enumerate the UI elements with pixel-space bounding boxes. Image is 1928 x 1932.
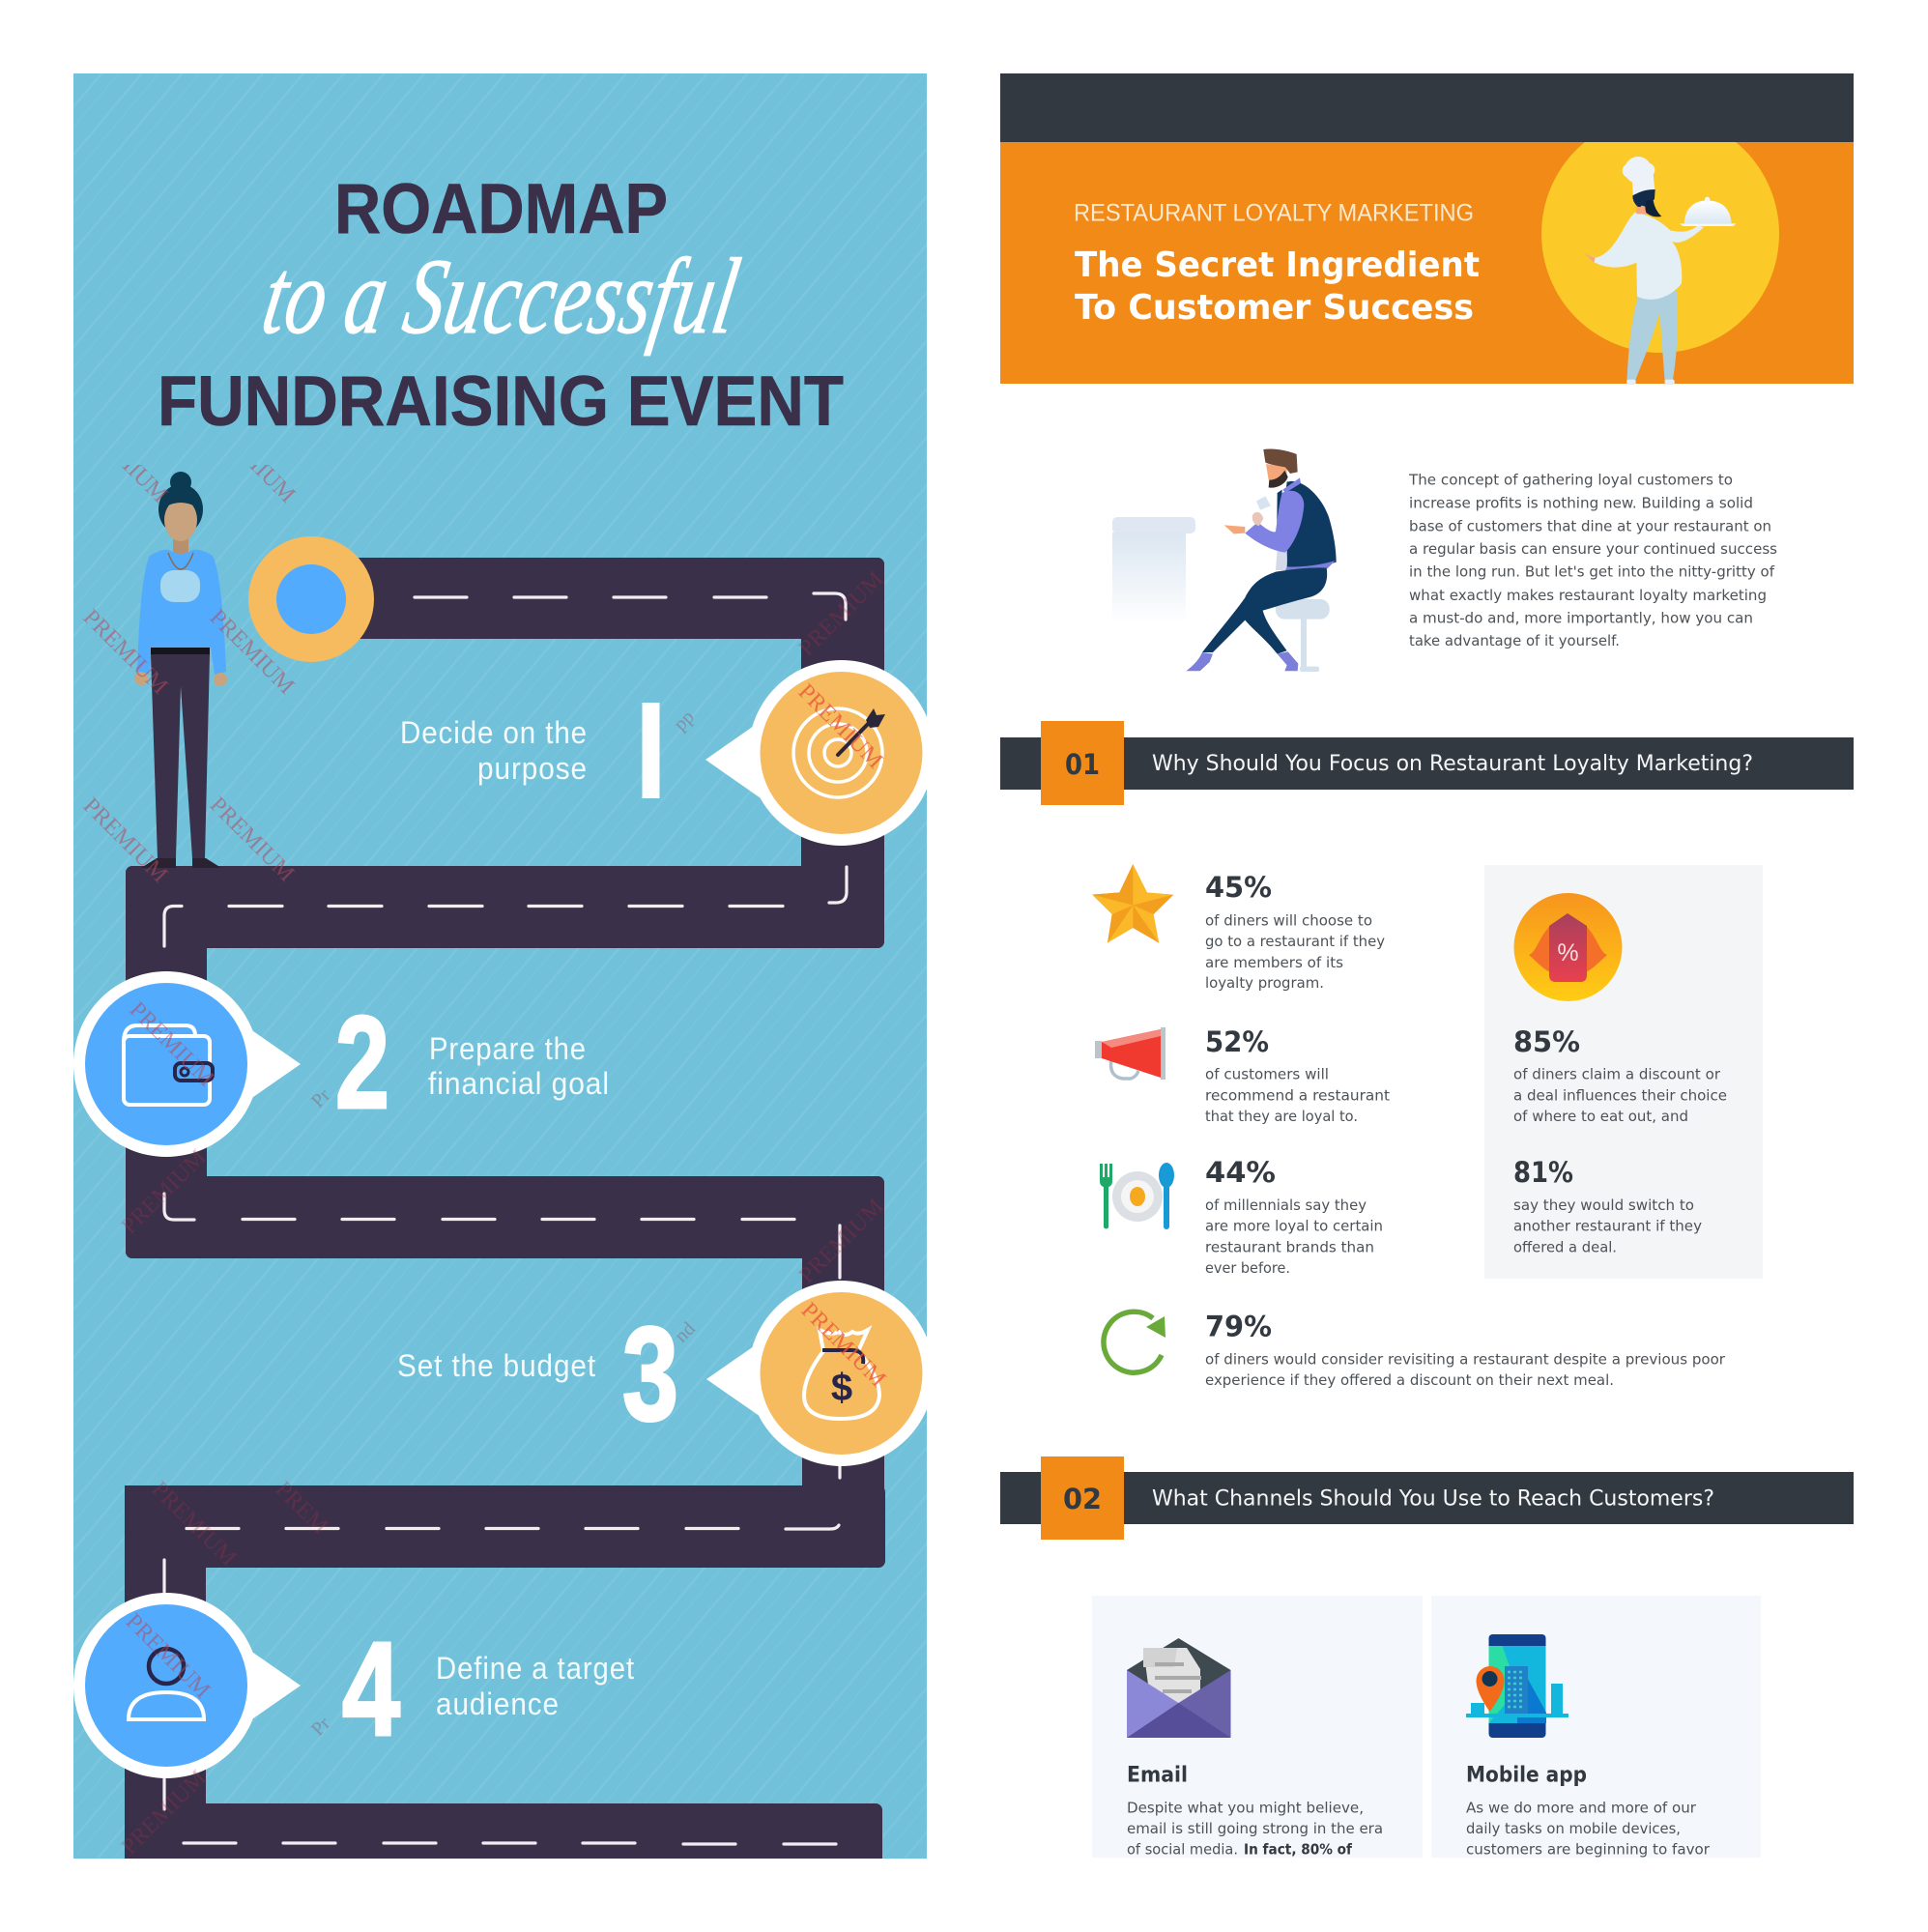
intro paragraph xyxy=(1408,472,1777,649)
intro paragraph: The concept of gathering loyal customers to xyxy=(1408,472,1733,489)
icon: open envelope xyxy=(1127,1638,1231,1738)
road lane dashes xyxy=(164,593,847,1844)
watermark stamps: PREMIUM xyxy=(206,414,300,507)
stat text: that they are loyal to. xyxy=(1205,1108,1358,1125)
watermark stamps: PREMIUM xyxy=(796,1298,890,1392)
stat text: 52% xyxy=(1205,1025,1269,1058)
banner kicker: RESTAURANT LOYALTY MARKETING xyxy=(1074,199,1474,226)
step 1 label xyxy=(402,721,586,785)
step 4 label: Define a target xyxy=(436,1651,635,1686)
step 1 label: Decide on the xyxy=(400,715,588,750)
intro paragraph: what exactly makes restaurant loyalty marketing xyxy=(1409,587,1767,604)
icon: megaphone xyxy=(1095,1027,1165,1080)
panel background with diagonal stripes xyxy=(73,73,927,1859)
watermark stamps: PREMIUM xyxy=(205,793,299,886)
stat: 85%: of diners claim a discount or xyxy=(1513,1065,1721,1082)
watermark stamps xyxy=(78,414,890,1860)
card title: Mobile app xyxy=(1466,1763,1587,1788)
step 4: define a target audience xyxy=(73,1593,635,1778)
stat text: experience if they offered a discount on their next meal. xyxy=(1205,1371,1614,1389)
step 3 label: Set the budget xyxy=(397,1348,596,1383)
stat text xyxy=(1205,1025,1390,1125)
card body: of social media. xyxy=(1127,1840,1238,1858)
panel: restaurant loyalty marketing xyxy=(1000,73,1854,1858)
stat text: are members of its xyxy=(1205,954,1343,971)
stat: 81%: 81% xyxy=(1513,1156,1573,1189)
stat: 81%: say they would switch to xyxy=(1513,1197,1694,1214)
start marker xyxy=(248,536,374,662)
step 4 label: audience xyxy=(436,1687,560,1721)
card body: customers are beginning to favor xyxy=(1466,1840,1711,1858)
watermark stamps: PREMIUM xyxy=(205,605,299,699)
stat text xyxy=(1205,871,1385,992)
icon: phone with city and map pin xyxy=(1466,1634,1568,1738)
stat: 52% xyxy=(1095,1025,1390,1125)
card body: daily tasks on mobile devices, xyxy=(1466,1820,1681,1837)
step 4 label xyxy=(437,1657,634,1715)
yellow sun circle xyxy=(1541,142,1779,353)
heading: roadmap title: ROADMAP xyxy=(334,170,668,248)
section header 01: Why Should You Focus on Restaurant Loyalty Marketing? xyxy=(1152,752,1753,776)
stat text: 79% xyxy=(1205,1311,1272,1343)
watermark stamps: PREMIUM xyxy=(125,997,218,1091)
icon: green refresh arrow xyxy=(1104,1312,1165,1372)
stat text: ever before. xyxy=(1205,1259,1290,1277)
watermark stamps: PREMIUM xyxy=(78,605,172,699)
stat: 85%: a deal influences their choice xyxy=(1513,1086,1727,1104)
intro paragraph: base of customers that dine at your restaurant on xyxy=(1409,518,1771,535)
banner title: To Customer Success xyxy=(1075,288,1474,328)
section header 02: 02 xyxy=(1063,1483,1102,1515)
shaded stat box background xyxy=(1484,865,1763,1279)
stat text: of diners will choose to xyxy=(1205,912,1372,930)
header banner xyxy=(1000,73,1854,385)
watermark stamps: Pr xyxy=(307,1713,334,1741)
step 2 label: Prepare the xyxy=(429,1031,587,1066)
illustration: chef with cloche xyxy=(1585,157,1737,385)
icon: target badge xyxy=(705,660,934,846)
channel card: mobile app xyxy=(1431,1596,1761,1858)
intro paragraph: a regular basis can ensure your continued success xyxy=(1409,540,1777,558)
stat text: are more loyal to certain xyxy=(1205,1218,1383,1235)
stat: 85%: 85% xyxy=(1513,1025,1580,1058)
section header 01: 01 xyxy=(1065,748,1100,781)
intro paragraph: a must-do and, more importantly, how you can xyxy=(1409,609,1753,626)
stat text xyxy=(1205,1311,1726,1389)
icon: discount tag badge: % xyxy=(1557,939,1579,966)
section header 02 xyxy=(1000,1456,1854,1540)
stat: 81%: offered a deal. xyxy=(1513,1239,1617,1256)
card body: As we do more and more of our xyxy=(1466,1800,1697,1817)
panel: fundraising roadmap xyxy=(73,73,934,1872)
watermark stamps: PREMIUM xyxy=(78,793,172,887)
step 1 label: purpose xyxy=(477,751,588,786)
step 2: prepare the financial goal xyxy=(73,971,610,1157)
icon: plate fork and spoon xyxy=(1100,1163,1174,1229)
stat: 81% xyxy=(1513,1156,1702,1256)
stat text: go to a restaurant if they xyxy=(1205,933,1385,950)
step number 2: 2 xyxy=(335,989,389,1136)
step number 3: 3 xyxy=(622,1300,678,1449)
step 3: set the budget xyxy=(397,1281,934,1466)
heading: roadmap title: to a Successful xyxy=(255,237,747,357)
watermark stamps: PREMIUM xyxy=(117,1145,211,1239)
watermark stamps: PREMIUM xyxy=(121,1609,215,1703)
intro paragraph: take advantage of it yourself. xyxy=(1409,632,1620,649)
heading: roadmap title xyxy=(161,183,843,426)
icon: star xyxy=(1092,864,1173,943)
stat text: of customers will xyxy=(1205,1065,1329,1082)
step number 1 xyxy=(642,703,659,798)
intro paragraph: increase profits is nothing new. Building a solid xyxy=(1409,495,1753,512)
stat text: 45% xyxy=(1205,871,1272,904)
watermark stamps: pp xyxy=(670,706,699,735)
stat text: loyalty program. xyxy=(1205,974,1324,992)
stat text xyxy=(1205,1156,1383,1277)
illustration: customer seated at counter xyxy=(1112,449,1337,672)
stat: 85%: of where to eat out, and xyxy=(1513,1108,1688,1125)
card body: email is still going strong in the era xyxy=(1127,1820,1383,1837)
card body xyxy=(1466,1800,1711,1858)
watermark stamps: nd xyxy=(671,1318,700,1347)
stat text: of diners would consider revisiting a restaurant despite a previous poor xyxy=(1205,1351,1726,1369)
watermark stamps: PREMIUM xyxy=(794,1195,888,1288)
figure: woman standing on road xyxy=(134,472,227,868)
channel card: email xyxy=(1092,1596,1423,1858)
stat: 85% xyxy=(1513,1025,1727,1125)
step number 4: 4 xyxy=(342,1615,400,1764)
card body: In fact, 80% of xyxy=(1244,1840,1352,1858)
stat: 81%: another restaurant if they xyxy=(1513,1218,1702,1235)
watermark stamps: PREMIUM xyxy=(147,1477,241,1571)
stat: 45% xyxy=(1092,864,1385,992)
watermark stamps: PREMIUM xyxy=(117,1766,211,1860)
card body xyxy=(1127,1800,1383,1858)
intro paragraph: in the long run. But let's get into the nitty-gritty of xyxy=(1409,562,1775,580)
stat: 79% xyxy=(1104,1311,1726,1389)
watermark stamps: Pr xyxy=(307,1084,334,1112)
watermark stamps: PREMIUM xyxy=(793,679,887,773)
section header 02: What Channels Should You Use to Reach Customers? xyxy=(1152,1486,1714,1512)
banner title xyxy=(1075,245,1480,328)
icon: wallet badge xyxy=(73,971,301,1157)
watermark stamps: PREMIUM xyxy=(78,414,172,507)
winding road xyxy=(125,558,885,1872)
step 1: decide on the purpose xyxy=(400,660,934,846)
stat text: restaurant brands than xyxy=(1205,1239,1374,1256)
stat: 44% xyxy=(1100,1156,1383,1277)
stat text: recommend a restaurant xyxy=(1205,1086,1390,1104)
heading: roadmap title: FUNDRAISING EVENT xyxy=(158,362,844,441)
icon: discount tag badge xyxy=(1513,893,1622,1001)
card title: Email xyxy=(1127,1763,1188,1788)
icon: money bag badge: $ xyxy=(831,1367,852,1409)
section header 01 xyxy=(1000,721,1854,805)
step 2 label xyxy=(428,1031,610,1101)
step 2 label: financial goal xyxy=(428,1066,610,1101)
card body: Despite what you might believe, xyxy=(1127,1800,1364,1817)
stat text: of millennials say they xyxy=(1205,1197,1367,1214)
banner title: The Secret Ingredient xyxy=(1075,245,1480,285)
stat text: 44% xyxy=(1205,1156,1276,1189)
icon: person badge xyxy=(73,1593,301,1778)
watermark stamps: PREMIUM xyxy=(794,567,888,661)
watermark stamps: PREM xyxy=(271,1477,332,1539)
icon: money bag badge xyxy=(706,1281,934,1466)
